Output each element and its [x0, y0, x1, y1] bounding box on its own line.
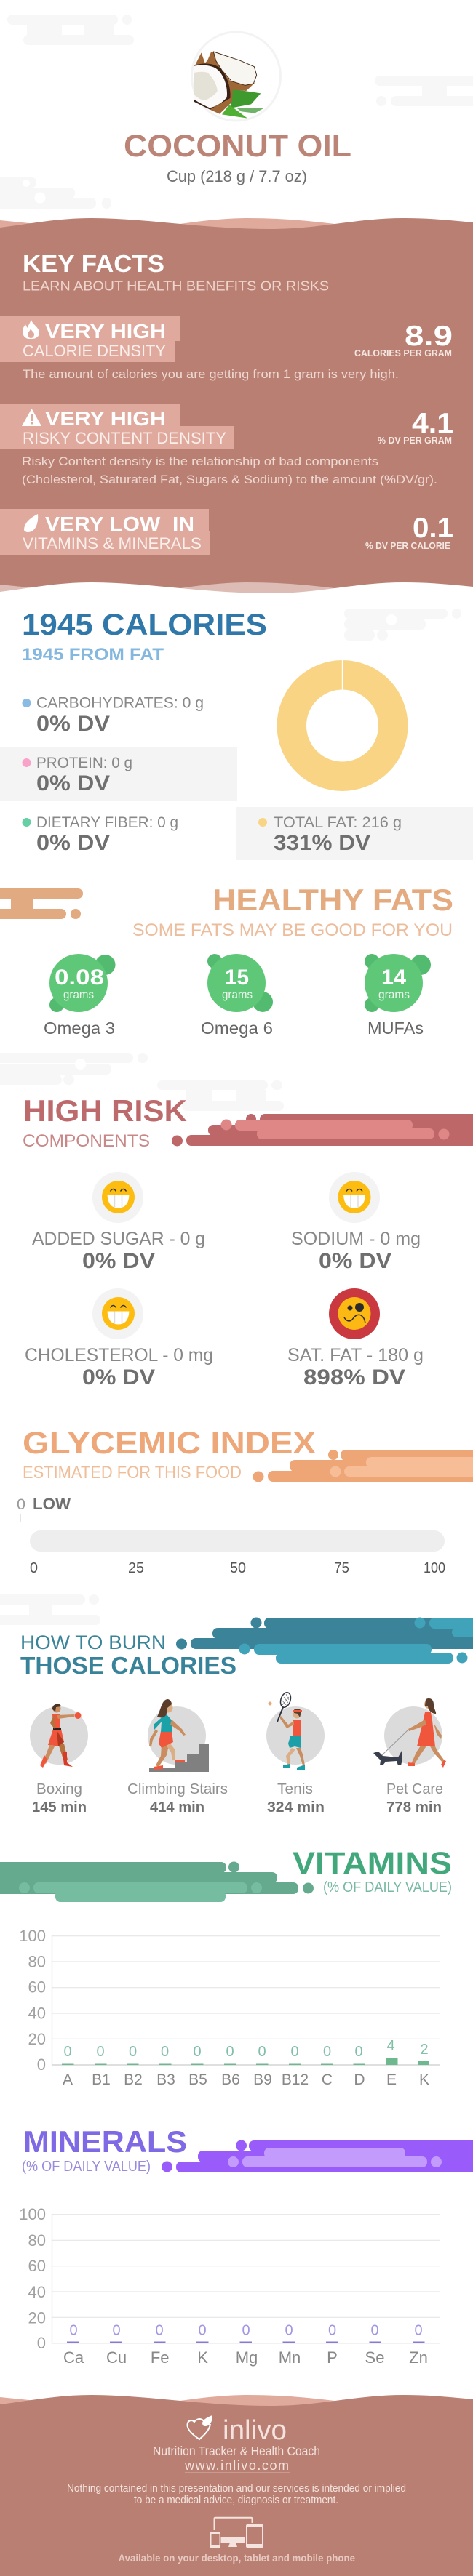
section ribbon: orange: [0, 888, 83, 919]
activity: tennis: Tenis: [277, 1781, 313, 1797]
bar chart: vitamins: 0: [290, 2044, 299, 2060]
item: saturated fat: 898% DV: [303, 1365, 405, 1389]
section ribbon: purple: [162, 2140, 473, 2172]
fact: risky content density: [0, 404, 453, 486]
bar chart: minerals: 0: [198, 2323, 207, 2339]
fact: calorie density: CALORIES PER GRAM: [354, 348, 452, 358]
availability note: Available on your desktop, tablet and mobile phone: [118, 2552, 355, 2564]
panel: vitamins: [0, 1846, 452, 2088]
bar chart: vitamins: D: [354, 2071, 365, 2088]
fact: vitamins and minerals: [0, 509, 453, 555]
fact: risky content density: RISKY CONTENT DENSITY: [23, 429, 226, 447]
activity: climbing stairs: Climbing Stairs: [127, 1781, 228, 1797]
disclaimer: Nothing contained in this presentation and our services is intended or implied: [67, 2483, 406, 2495]
panel: how to burn those calories: [20, 1617, 473, 1815]
bar chart: vitamins: 80: [28, 1953, 46, 1971]
fact: vitamins and minerals: % DV PER CALORIE: [365, 541, 450, 551]
scale labels: 100: [424, 1560, 445, 1576]
scale labels: 0: [30, 1560, 38, 1576]
bar chart: vitamins: B9: [253, 2071, 272, 2088]
fact: vitamins and minerals: VITAMINS & MINERALS: [23, 534, 202, 553]
bar chart: minerals: 0: [328, 2323, 336, 2339]
logo: heart and leaf: [187, 2415, 212, 2439]
bar chart: vitamins: B2: [124, 2071, 143, 2088]
hero: coconut illustration: [192, 32, 281, 121]
serving size: Cup (218 g / 7.7 oz): [167, 167, 307, 185]
stat: mufas: MUFAs: [367, 1019, 424, 1038]
panel: key facts: [0, 218, 473, 607]
icon: boxer: [40, 1704, 82, 1768]
panel: glycemic index: [17, 1426, 473, 1576]
bar chart: vitamins: 100: [19, 1927, 46, 1945]
bar chart: minerals: 40: [28, 2283, 46, 2301]
item: sodium: SODIUM - 0 mg: [291, 1229, 421, 1249]
bar chart: vitamins: 0: [193, 2044, 202, 2060]
activity: pet care: Pet Care: [386, 1781, 443, 1797]
legend: total fat: [236, 807, 473, 860]
donut chart: [292, 660, 393, 777]
bar chart: minerals: 0: [155, 2323, 164, 2339]
tagline: Nutrition Tracker & Health Coach: [153, 2444, 320, 2458]
bar chart: vitamins: 0: [96, 2044, 105, 2060]
bar chart: vitamins: B1: [92, 2071, 111, 2088]
bar chart: vitamins: 60: [28, 1978, 46, 1997]
icon: devices: [210, 2518, 263, 2548]
bar chart: minerals: Se: [365, 2348, 384, 2367]
activity: boxing: 145 min: [32, 1799, 87, 1815]
item: sodium: 0% DV: [319, 1249, 391, 1273]
bar chart: minerals: 80: [28, 2231, 46, 2250]
heading: minerals: MINERALS: [23, 2124, 187, 2159]
activity: boxing: Boxing: [36, 1781, 82, 1797]
legend: carbohydrates: [22, 695, 204, 736]
fact: vitamins and minerals: 0.1: [413, 513, 453, 544]
fact: calorie density: VERY HIGH: [45, 320, 166, 342]
scale labels: 25: [128, 1560, 144, 1576]
scale labels: [30, 1560, 445, 1576]
icon: happy face: [102, 1181, 135, 1213]
bar chart: vitamins: 0: [226, 2044, 234, 2060]
subheading: from fat: 1945 FROM FAT: [22, 645, 164, 665]
activity: pet care: [373, 1698, 446, 1815]
footer: [0, 2395, 473, 2576]
legend: total fat: TOTAL FAT: 216 g: [274, 814, 402, 831]
panel: high risk components: [23, 1094, 473, 1389]
icon: happy face: [102, 1297, 135, 1330]
item: added sugar: [32, 1172, 205, 1273]
fact: calorie density: CALORIE DENSITY: [23, 342, 166, 360]
bar chart: vitamins: E: [386, 2071, 397, 2088]
bar chart: vitamins: 0: [161, 2044, 169, 2060]
bar chart: vitamins: 0: [63, 2044, 72, 2060]
scale labels: 75: [334, 1560, 349, 1576]
bar chart: minerals: 60: [28, 2257, 46, 2275]
bar chart: vitamins: B3: [156, 2071, 175, 2088]
item: added sugar: 0% DV: [82, 1249, 155, 1273]
item: added sugar: ADDED SUGAR - 0 g: [32, 1229, 205, 1249]
fact: calorie density: [0, 316, 453, 381]
bar chart: minerals: Zn: [409, 2348, 428, 2367]
bar chart: minerals: 0: [414, 2323, 423, 2339]
bar chart: vitamins: 20: [28, 2030, 46, 2048]
bar chart: vitamins: 0: [354, 2044, 363, 2060]
bar chart: minerals: 20: [28, 2309, 46, 2327]
heading: glycemic index: GLYCEMIC INDEX: [23, 1426, 316, 1461]
icon: woman walking dog: [373, 1698, 446, 1768]
activity: pet care: 778 min: [386, 1799, 442, 1815]
bar chart: vitamins: B6: [221, 2071, 240, 2088]
title: COCONUT OIL: [124, 129, 351, 164]
heading: calories: 1945 CALORIES: [22, 607, 267, 641]
bar chart: vitamins: 0: [129, 2044, 137, 2060]
fact: risky content density: % DV PER GRAM: [378, 436, 452, 446]
fact: risky content density: Risky Content density is the relationship of bad components: [22, 455, 378, 468]
fact: risky content density: (Cholesterol, Saturated Fat, Sugars & Sodium) to the amount (%DV/gr).: [22, 473, 437, 486]
fact: risky content density: 4.1: [412, 408, 453, 439]
bar chart: vitamins: K: [419, 2071, 429, 2088]
stat: omega 3: [44, 954, 115, 1038]
bar chart: vitamins: B5: [188, 2071, 207, 2088]
stat: omega 6: Omega 6: [201, 1019, 273, 1038]
bar chart: minerals: Mg: [236, 2348, 258, 2367]
bar chart: minerals: P: [327, 2348, 338, 2367]
panel: minerals: [19, 2124, 473, 2367]
heading: key facts: KEY FACTS: [23, 251, 164, 278]
icon: warning triangle: [22, 409, 41, 426]
bar chart: vitamins: B12: [282, 2071, 309, 2088]
heading: those calories: THOSE CALORIES: [20, 1652, 236, 1679]
disclaimer: to be a medical advice, diagnosis or treatment.: [134, 2495, 338, 2506]
bar chart: minerals: K: [197, 2348, 208, 2367]
bar chart: minerals: 0: [69, 2323, 78, 2339]
stat: mufas: grams: [378, 989, 410, 1001]
item: cholesterol: [25, 1288, 213, 1389]
subheading: components: COMPONENTS: [23, 1131, 150, 1151]
item: saturated fat: [287, 1288, 424, 1389]
bar chart: minerals: 100: [19, 2205, 46, 2223]
activity: tennis: 324 min: [267, 1799, 325, 1815]
activity: tennis: [266, 1691, 325, 1815]
bar chart: vitamins: C: [322, 2071, 333, 2088]
subheading: SOME FATS MAY BE GOOD FOR YOU: [132, 920, 453, 940]
icon: flame: [23, 320, 39, 339]
disclaimer: [67, 2483, 406, 2506]
legend: protein: 0% DV: [36, 771, 110, 795]
section ribbon: orange: [253, 1450, 473, 1482]
fact: calorie density: The amount of calories you are getting from 1 gram is very high.: [23, 368, 399, 381]
section ribbon: green: [0, 1861, 314, 1902]
bar chart: vitamins: 0: [37, 2055, 46, 2074]
icon: person climbing stairs: [149, 1699, 209, 1772]
legend: carbohydrates: CARBOHYDRATES: 0 g: [36, 695, 204, 711]
icon: happy face: [338, 1181, 371, 1213]
item: saturated fat: SAT. FAT - 180 g: [287, 1346, 424, 1365]
bar chart: minerals: Fe: [151, 2348, 170, 2367]
bar chart: vitamins: 0: [323, 2044, 331, 2060]
stat: omega 6: [201, 954, 273, 1038]
fact: calorie density: 8.9: [405, 321, 453, 352]
heading: how to burn: HOW TO BURN: [20, 1632, 166, 1653]
subheading: LEARN ABOUT HEALTH BENEFITS OR RISKS: [23, 279, 329, 294]
bar chart: minerals: Mn: [279, 2348, 301, 2367]
stat: mufas: 14: [381, 966, 406, 990]
item: sodium: [291, 1172, 421, 1273]
legend: carbohydrates: 0% DV: [36, 712, 110, 736]
stat: omega 6: 15: [225, 966, 249, 990]
bar chart: vitamins: [19, 1927, 440, 2088]
icon: unhappy face: [338, 1297, 371, 1330]
heading: high risk: HIGH RISK: [23, 1094, 187, 1128]
legend: dietary fiber: [22, 814, 178, 855]
stat: mufas: [365, 954, 431, 1038]
item: cholesterol: 0% DV: [82, 1365, 155, 1389]
legend: protein: PROTEIN: 0 g: [36, 755, 132, 771]
bar chart: minerals: 0: [112, 2323, 121, 2339]
stat: omega 3: Omega 3: [44, 1019, 115, 1038]
fact: vitamins and minerals: VERY LOW IN: [45, 513, 194, 535]
heading: healthy fats: HEALTHY FATS: [212, 883, 453, 917]
bar chart: minerals: Ca: [63, 2348, 84, 2367]
activity: climbing stairs: [127, 1699, 228, 1815]
glycemic scale bar: [30, 1530, 445, 1552]
scale labels: 50: [230, 1560, 246, 1576]
bar chart: minerals: Cu: [106, 2348, 127, 2367]
subheading: (% OF DAILY VALUE): [22, 2158, 151, 2175]
activity: climbing stairs: 414 min: [150, 1799, 204, 1815]
subheading: (% OF DAILY VALUE): [323, 1879, 452, 1895]
bar chart: vitamins: 2: [420, 2042, 429, 2058]
bar chart: vitamins: A: [63, 2071, 73, 2088]
bar chart: minerals: 0: [37, 2334, 46, 2352]
icon: tennis player: [268, 1691, 305, 1770]
glycemic value marker: 0: [17, 1496, 25, 1513]
bar chart: minerals: 0: [370, 2323, 379, 2339]
glycemic value marker: [17, 1495, 71, 1522]
section ribbon: red: [172, 1114, 473, 1146]
item: cholesterol: CHOLESTEROL - 0 mg: [25, 1346, 213, 1365]
stat: omega 3: 0.08: [55, 966, 104, 990]
bar chart: minerals: 0: [285, 2323, 293, 2339]
legend: dietary fiber: 0% DV: [36, 831, 110, 855]
bar chart: minerals: [19, 2205, 440, 2367]
fact: risky content density: VERY HIGH: [45, 407, 166, 430]
heading: vitamins: VITAMINS: [293, 1846, 452, 1881]
legend: dietary fiber: DIETARY FIBER: 0 g: [36, 814, 178, 831]
section ribbon: teal: [176, 1617, 473, 1664]
legend: total fat: 331% DV: [274, 831, 370, 855]
subheading: ESTIMATED FOR THIS FOOD: [23, 1463, 242, 1482]
panel: calories: [0, 607, 473, 860]
icon: leaf: [24, 514, 38, 532]
bar chart: vitamins: 40: [28, 2005, 46, 2023]
activity: boxing: [30, 1704, 88, 1815]
stat: omega 3: grams: [63, 989, 94, 1001]
bar chart: vitamins: 0: [258, 2044, 266, 2060]
legend: protein: [0, 747, 237, 801]
website link: www.inlivo.com: [184, 2458, 289, 2473]
panel: healthy fats: [0, 883, 453, 1038]
stat: omega 6: grams: [222, 989, 253, 1001]
bar chart: vitamins: 4: [386, 2038, 395, 2054]
glycemic value marker: LOW: [33, 1495, 71, 1513]
logo wordmark: inlivo: [223, 2415, 287, 2446]
bar chart: minerals: 0: [242, 2323, 250, 2339]
